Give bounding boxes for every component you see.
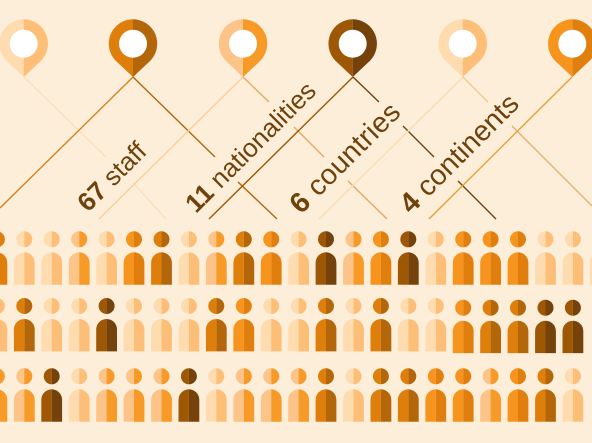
map pin 3	[219, 19, 267, 77]
map pin 6	[548, 19, 592, 77]
label: 11 nationalities: 11 nationalities	[179, 75, 322, 218]
people row 2	[0, 298, 583, 353]
people row 1	[0, 231, 592, 285]
map pin 1	[0, 19, 48, 77]
label: 4 continents: 4 continents	[393, 88, 526, 220]
map pin 2	[109, 19, 157, 77]
map pin 5	[438, 19, 487, 77]
connector lines	[0, 77, 592, 219]
label: 6 countries: 6 countries	[283, 96, 407, 220]
map pin 4	[328, 19, 377, 77]
label: 67 staff: 67 staff	[71, 135, 153, 217]
people row 3	[0, 368, 583, 422]
